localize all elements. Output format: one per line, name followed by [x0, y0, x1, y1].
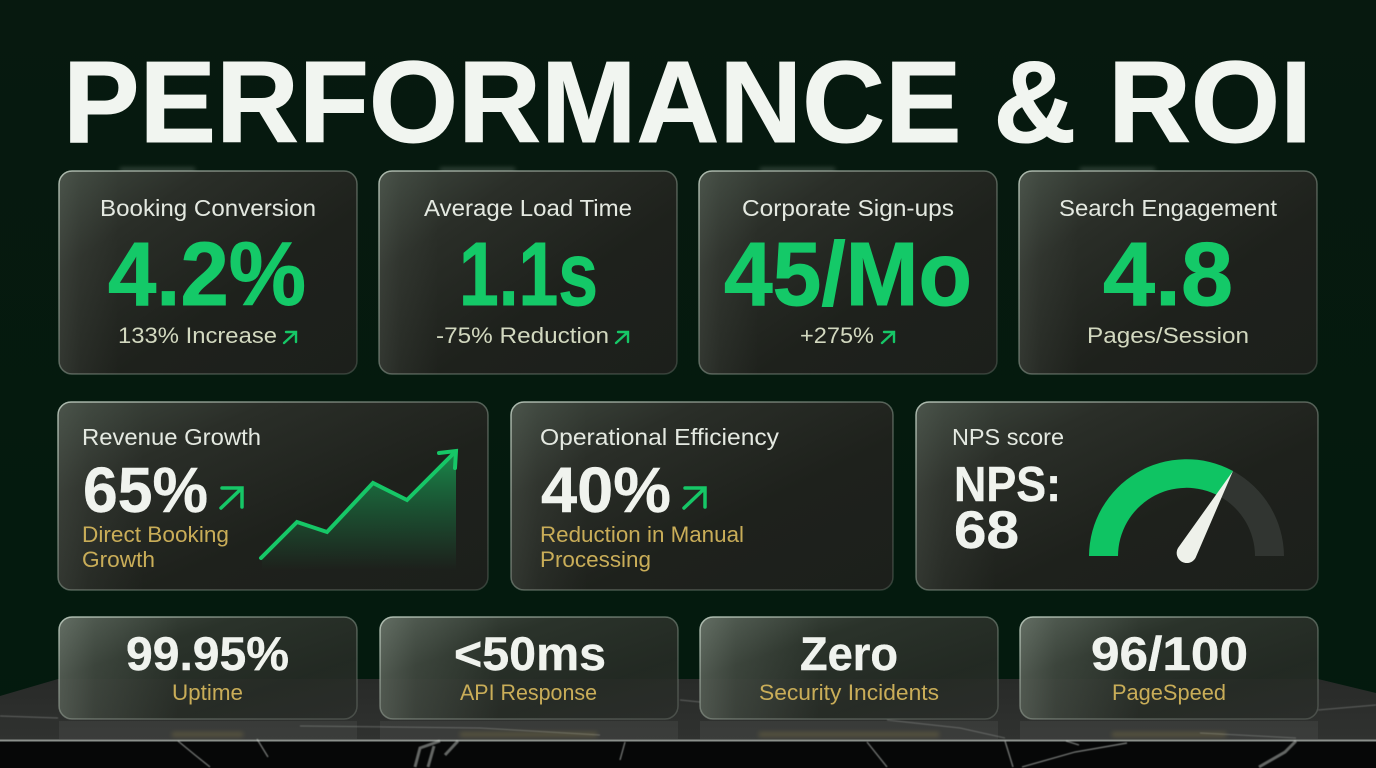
panel: revenue growth — [58, 402, 488, 590]
description: Reduction in Manual — [540, 522, 744, 547]
description: Processing — [540, 547, 651, 572]
label: Revenue Growth — [82, 424, 261, 450]
change: 133% Increase — [118, 323, 277, 348]
description: Direct Booking — [82, 522, 229, 547]
panel: pagespeed — [1020, 617, 1318, 719]
panel: booking conversion — [59, 171, 357, 374]
title: PERFORMANCE & ROI — [63, 37, 1312, 167]
value: 68 — [954, 501, 1019, 560]
panel: security incidents — [700, 617, 998, 719]
label: API Response — [460, 680, 597, 705]
label: PageSpeed — [1112, 680, 1226, 705]
icon: up arrow — [221, 488, 242, 508]
value: 4.8 — [1103, 225, 1233, 325]
label: Booking Conversion — [100, 195, 316, 221]
label: Average Load Time — [424, 195, 632, 221]
label: Corporate Sign-ups — [742, 195, 954, 221]
marble table — [0, 679, 1376, 768]
value: <50ms — [454, 627, 606, 680]
panel: corporate sign-ups — [699, 171, 997, 374]
label: Search Engagement — [1059, 195, 1278, 221]
panel: api response — [380, 617, 678, 719]
change: -75% Reduction — [436, 323, 609, 348]
label: Operational Efficiency — [540, 424, 780, 450]
card top glows — [120, 168, 1155, 171]
card reflections on table — [59, 721, 1318, 739]
value: 65% — [83, 454, 208, 526]
value: 1.1s — [459, 225, 598, 325]
panel: uptime — [59, 617, 357, 719]
icon: up arrow — [882, 332, 894, 343]
value: 4.2% — [108, 225, 306, 325]
label: Security Incidents — [759, 680, 939, 705]
value: 45/Mo — [724, 225, 972, 325]
panel: operational efficiency — [511, 402, 893, 590]
icon: up arrow — [616, 332, 628, 343]
icon: up arrow — [284, 332, 296, 343]
panel: nps score — [916, 402, 1318, 590]
label: NPS score — [952, 424, 1064, 450]
description: Growth — [82, 547, 155, 572]
panel: average load time — [379, 171, 677, 374]
value: NPS: — [954, 458, 1061, 512]
value: 99.95% — [126, 627, 289, 680]
gauge — [1089, 459, 1284, 563]
change: +275% — [800, 323, 874, 348]
panel: search engagement — [1019, 171, 1317, 374]
value: Zero — [800, 627, 898, 680]
icon: up arrow — [684, 488, 705, 508]
value: 96/100 — [1091, 627, 1248, 680]
area line chart — [261, 450, 456, 570]
value: 40% — [541, 454, 671, 526]
label: Uptime — [172, 680, 243, 705]
change: Pages/Session — [1087, 323, 1249, 348]
